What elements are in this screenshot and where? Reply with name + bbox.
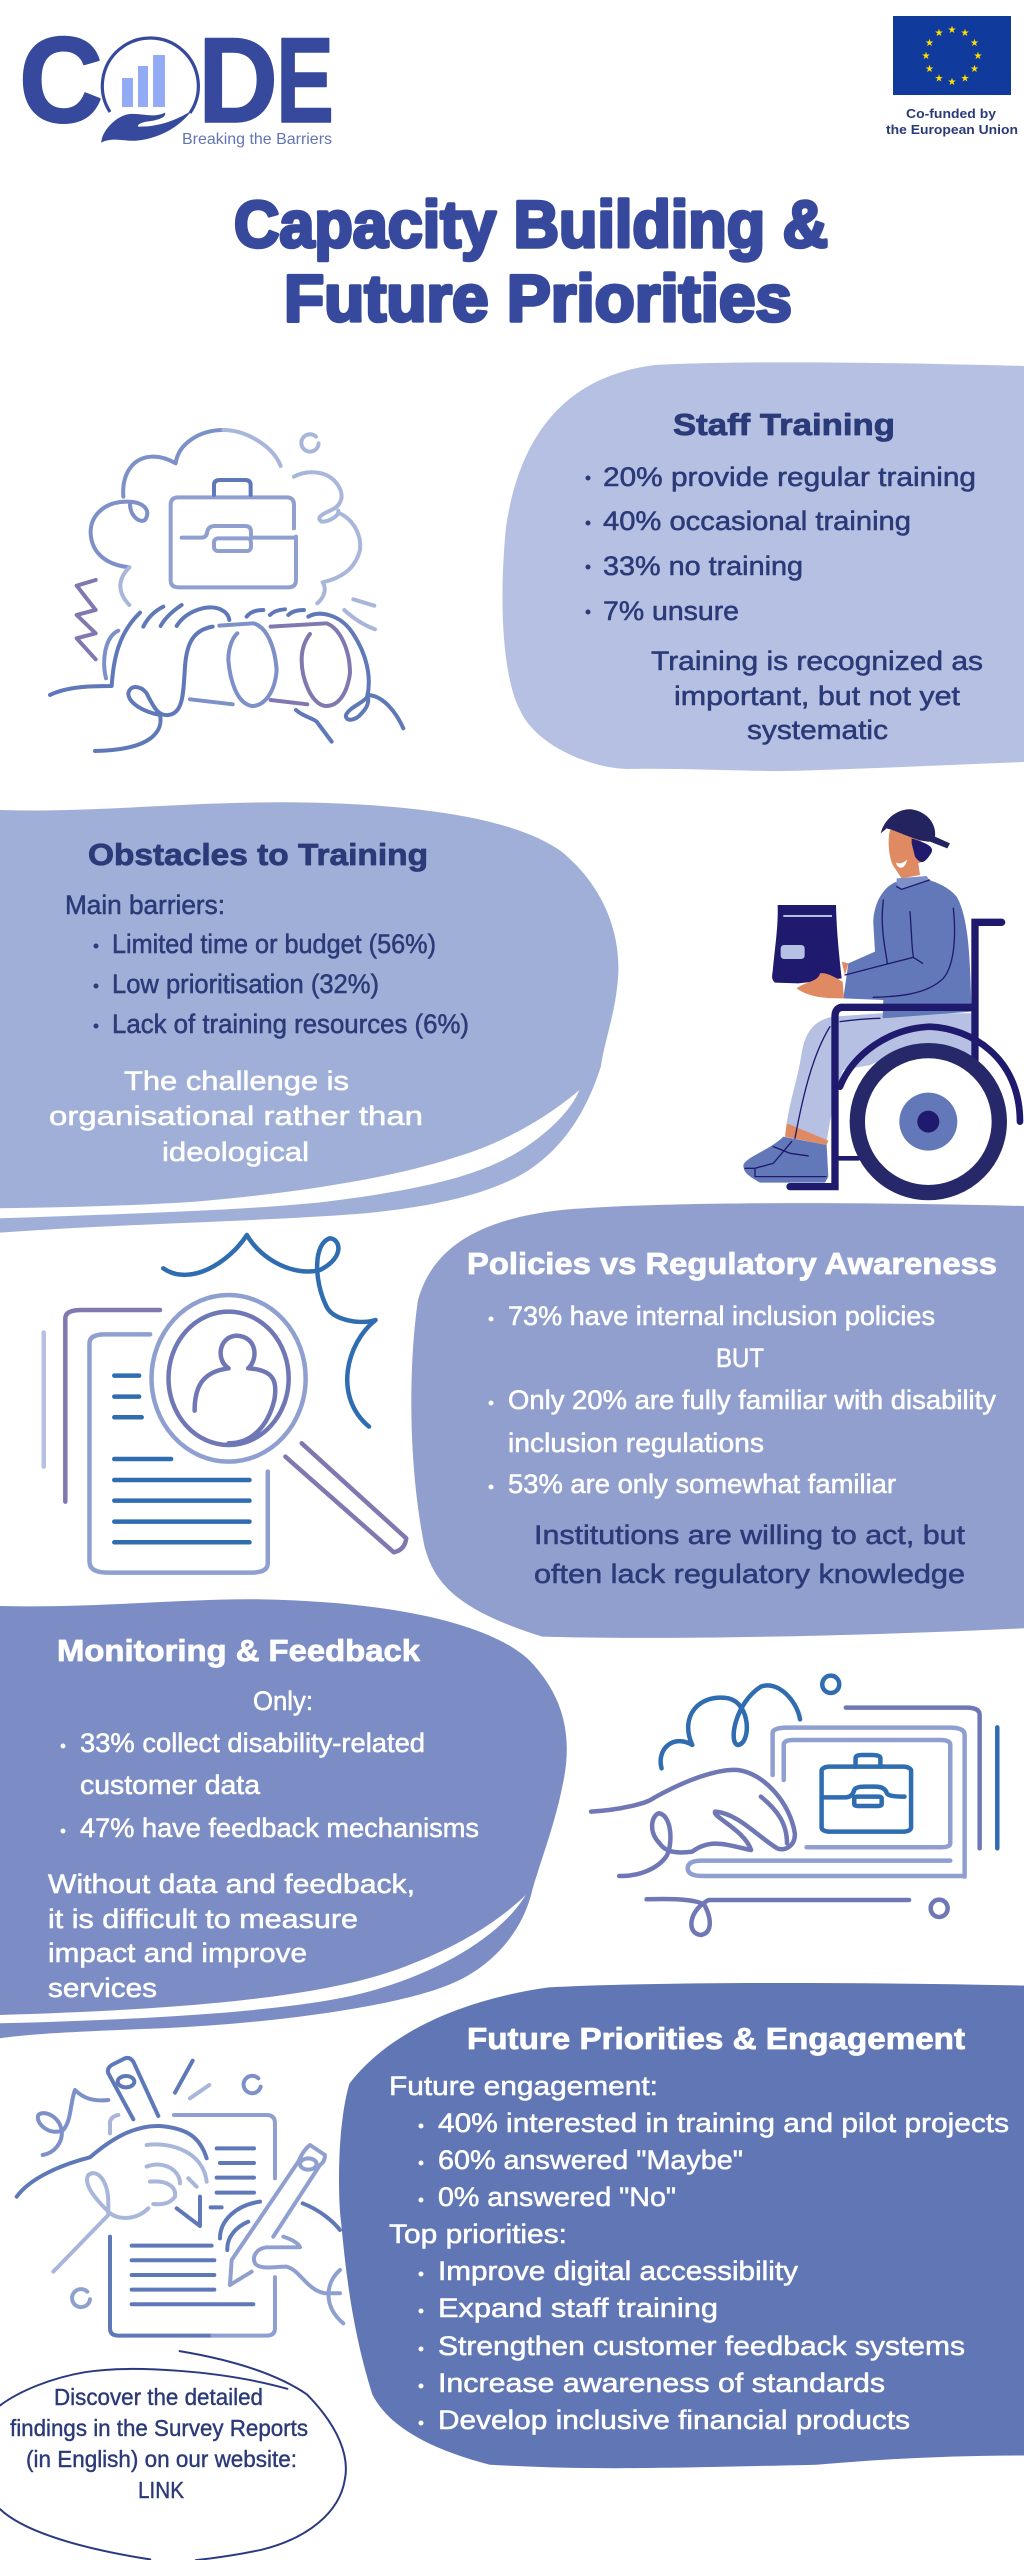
panel background xyxy=(339,1983,1024,2468)
findings list: 53% are only somewhat familiar xyxy=(508,1469,896,1499)
data list: customer data xyxy=(80,1770,261,1800)
takeaway: important, but not yet xyxy=(674,681,961,711)
takeaway xyxy=(651,646,983,745)
heading: Policies vs Regulatory Awareness xyxy=(467,1246,997,1281)
bullet list: 20% provide regular training xyxy=(603,462,976,492)
top priorities list: Strengthen customer feedback systems xyxy=(438,2331,965,2361)
illustration: hands holding briefcase thought cloud xyxy=(50,430,403,751)
takeaway: Institutions are willing to act, but xyxy=(534,1520,966,1550)
barriers list: Main barriers: xyxy=(65,890,225,920)
bullet list: 7% unsure xyxy=(603,596,739,626)
callout: survey reports link xyxy=(0,2351,346,2560)
takeaway: it is difficult to measure xyxy=(48,1904,358,1934)
callout: survey reports link: Discover the detailed xyxy=(54,2384,263,2410)
top priorities list: Increase awareness of standards xyxy=(438,2368,885,2398)
logo: EU flag and co-funding note: ★ xyxy=(948,25,957,36)
findings list: inclusion regulations xyxy=(508,1428,764,1458)
takeaway: impact and improve xyxy=(48,1938,307,1968)
logo: EU flag and co-funding note: the European Union xyxy=(886,122,1018,137)
takeaway xyxy=(48,1869,415,2003)
logo: EU flag and co-funding note: ★ xyxy=(935,74,944,84)
illustration: hand on laptop with briefcase xyxy=(591,1676,997,1935)
barriers list xyxy=(65,890,469,1039)
future engagement list: 60% answered "Maybe" xyxy=(438,2145,743,2175)
data list: 47% have feedback mechanisms xyxy=(80,1813,479,1843)
top priorities list: Top priorities: xyxy=(389,2219,567,2249)
bullet list: 40% occasional training xyxy=(603,506,911,536)
takeaway xyxy=(534,1520,966,1589)
title xyxy=(234,187,828,335)
logo: EU flag and co-funding note: ★ xyxy=(935,28,944,39)
heading: Obstacles to Training xyxy=(88,837,428,872)
logo: EU flag and co-funding note: ★ xyxy=(974,51,983,62)
heading: Staff Training xyxy=(673,407,895,442)
panel: obstacles to training xyxy=(0,802,618,1233)
illustration: hand writing on document xyxy=(17,2058,343,2336)
panel background xyxy=(0,1599,567,2038)
title: Future Priorities xyxy=(284,261,792,335)
future engagement list xyxy=(389,2071,1009,2212)
barriers list: Lack of training resources (6%) xyxy=(112,1009,469,1039)
bullet list xyxy=(586,462,976,626)
logo: EU flag and co-funding note: ★ xyxy=(970,64,979,75)
logo: EU flag and co-funding note: ★ xyxy=(925,38,934,49)
takeaway xyxy=(49,1066,423,1167)
logo: CODE: D xyxy=(198,12,278,148)
logo: EU flag and co-funding note: Co-funded by xyxy=(906,106,997,121)
bullet list: 33% no training xyxy=(603,551,803,581)
heading: Monitoring & Feedback xyxy=(57,1633,421,1668)
panel background xyxy=(0,802,618,1233)
callout: survey reports link: findings in the Survey Reports xyxy=(10,2415,308,2441)
logo: CODE: C xyxy=(19,12,103,148)
barriers list: Low prioritisation (32%) xyxy=(112,969,379,999)
illustration: person in wheelchair holding a bag xyxy=(743,809,1020,1193)
takeaway: ideological xyxy=(162,1137,309,1167)
logo: CODE: Breaking the Barriers xyxy=(182,131,332,148)
findings list: BUT xyxy=(716,1343,764,1373)
future engagement list: 0% answered "No" xyxy=(438,2182,676,2212)
findings list: 73% have internal inclusion policies xyxy=(508,1301,935,1331)
takeaway: The challenge is xyxy=(124,1066,349,1096)
takeaway: Training is recognized as xyxy=(651,646,983,676)
heading: Future Priorities & Engagement xyxy=(467,2021,965,2056)
data list xyxy=(61,1686,479,1843)
panel: policies vs regulatory awareness xyxy=(411,1203,1024,1638)
top priorities list: Develop inclusive financial products xyxy=(438,2405,910,2435)
illustration: magnifier over document xyxy=(44,1235,406,1573)
data list: Only: xyxy=(253,1686,313,1716)
logo: CODE xyxy=(19,12,334,148)
takeaway: services xyxy=(48,1973,157,2003)
findings list xyxy=(489,1301,996,1499)
data list: 33% collect disability-related xyxy=(80,1728,425,1758)
panel background xyxy=(502,362,1024,771)
panel: staff training xyxy=(502,362,1024,771)
future engagement list: 40% interested in training and pilot projects xyxy=(438,2108,1009,2138)
takeaway: Without data and feedback, xyxy=(48,1869,415,1899)
findings list: Only 20% are fully familiar with disability xyxy=(508,1385,996,1415)
takeaway: systematic xyxy=(747,715,888,745)
logo: EU flag and co-funding note: ★ xyxy=(922,51,931,62)
takeaway: often lack regulatory knowledge xyxy=(534,1559,965,1589)
panel: monitoring and feedback xyxy=(0,1599,567,2038)
panel: future priorities and engagement xyxy=(339,1983,1024,2468)
top priorities list: Expand staff training xyxy=(438,2293,718,2323)
takeaway: organisational rather than xyxy=(49,1101,423,1131)
logo: EU flag and co-funding note: ★ xyxy=(948,77,957,88)
callout: survey reports link: LINK xyxy=(138,2477,185,2503)
title: Capacity Building & xyxy=(234,187,828,261)
panel background xyxy=(411,1203,1024,1638)
logo: EU flag and co-funding note: ★ xyxy=(925,64,934,75)
barriers list: Limited time or budget (56%) xyxy=(112,929,436,959)
logo: EU flag and co-funding note: ★ xyxy=(961,28,970,39)
callout: survey reports link: (in English) on our website: xyxy=(26,2446,297,2472)
top priorities list: Improve digital accessibility xyxy=(438,2256,799,2286)
top priorities list xyxy=(389,2219,965,2435)
logo: EU flag and co-funding note: ★ xyxy=(970,38,979,49)
logo: CODE: E xyxy=(276,12,334,148)
logo: EU flag and co-funding note: ★ xyxy=(961,74,970,84)
logo: EU flag and co-funding note xyxy=(886,16,1018,137)
future engagement list: Future engagement: xyxy=(389,2071,658,2101)
